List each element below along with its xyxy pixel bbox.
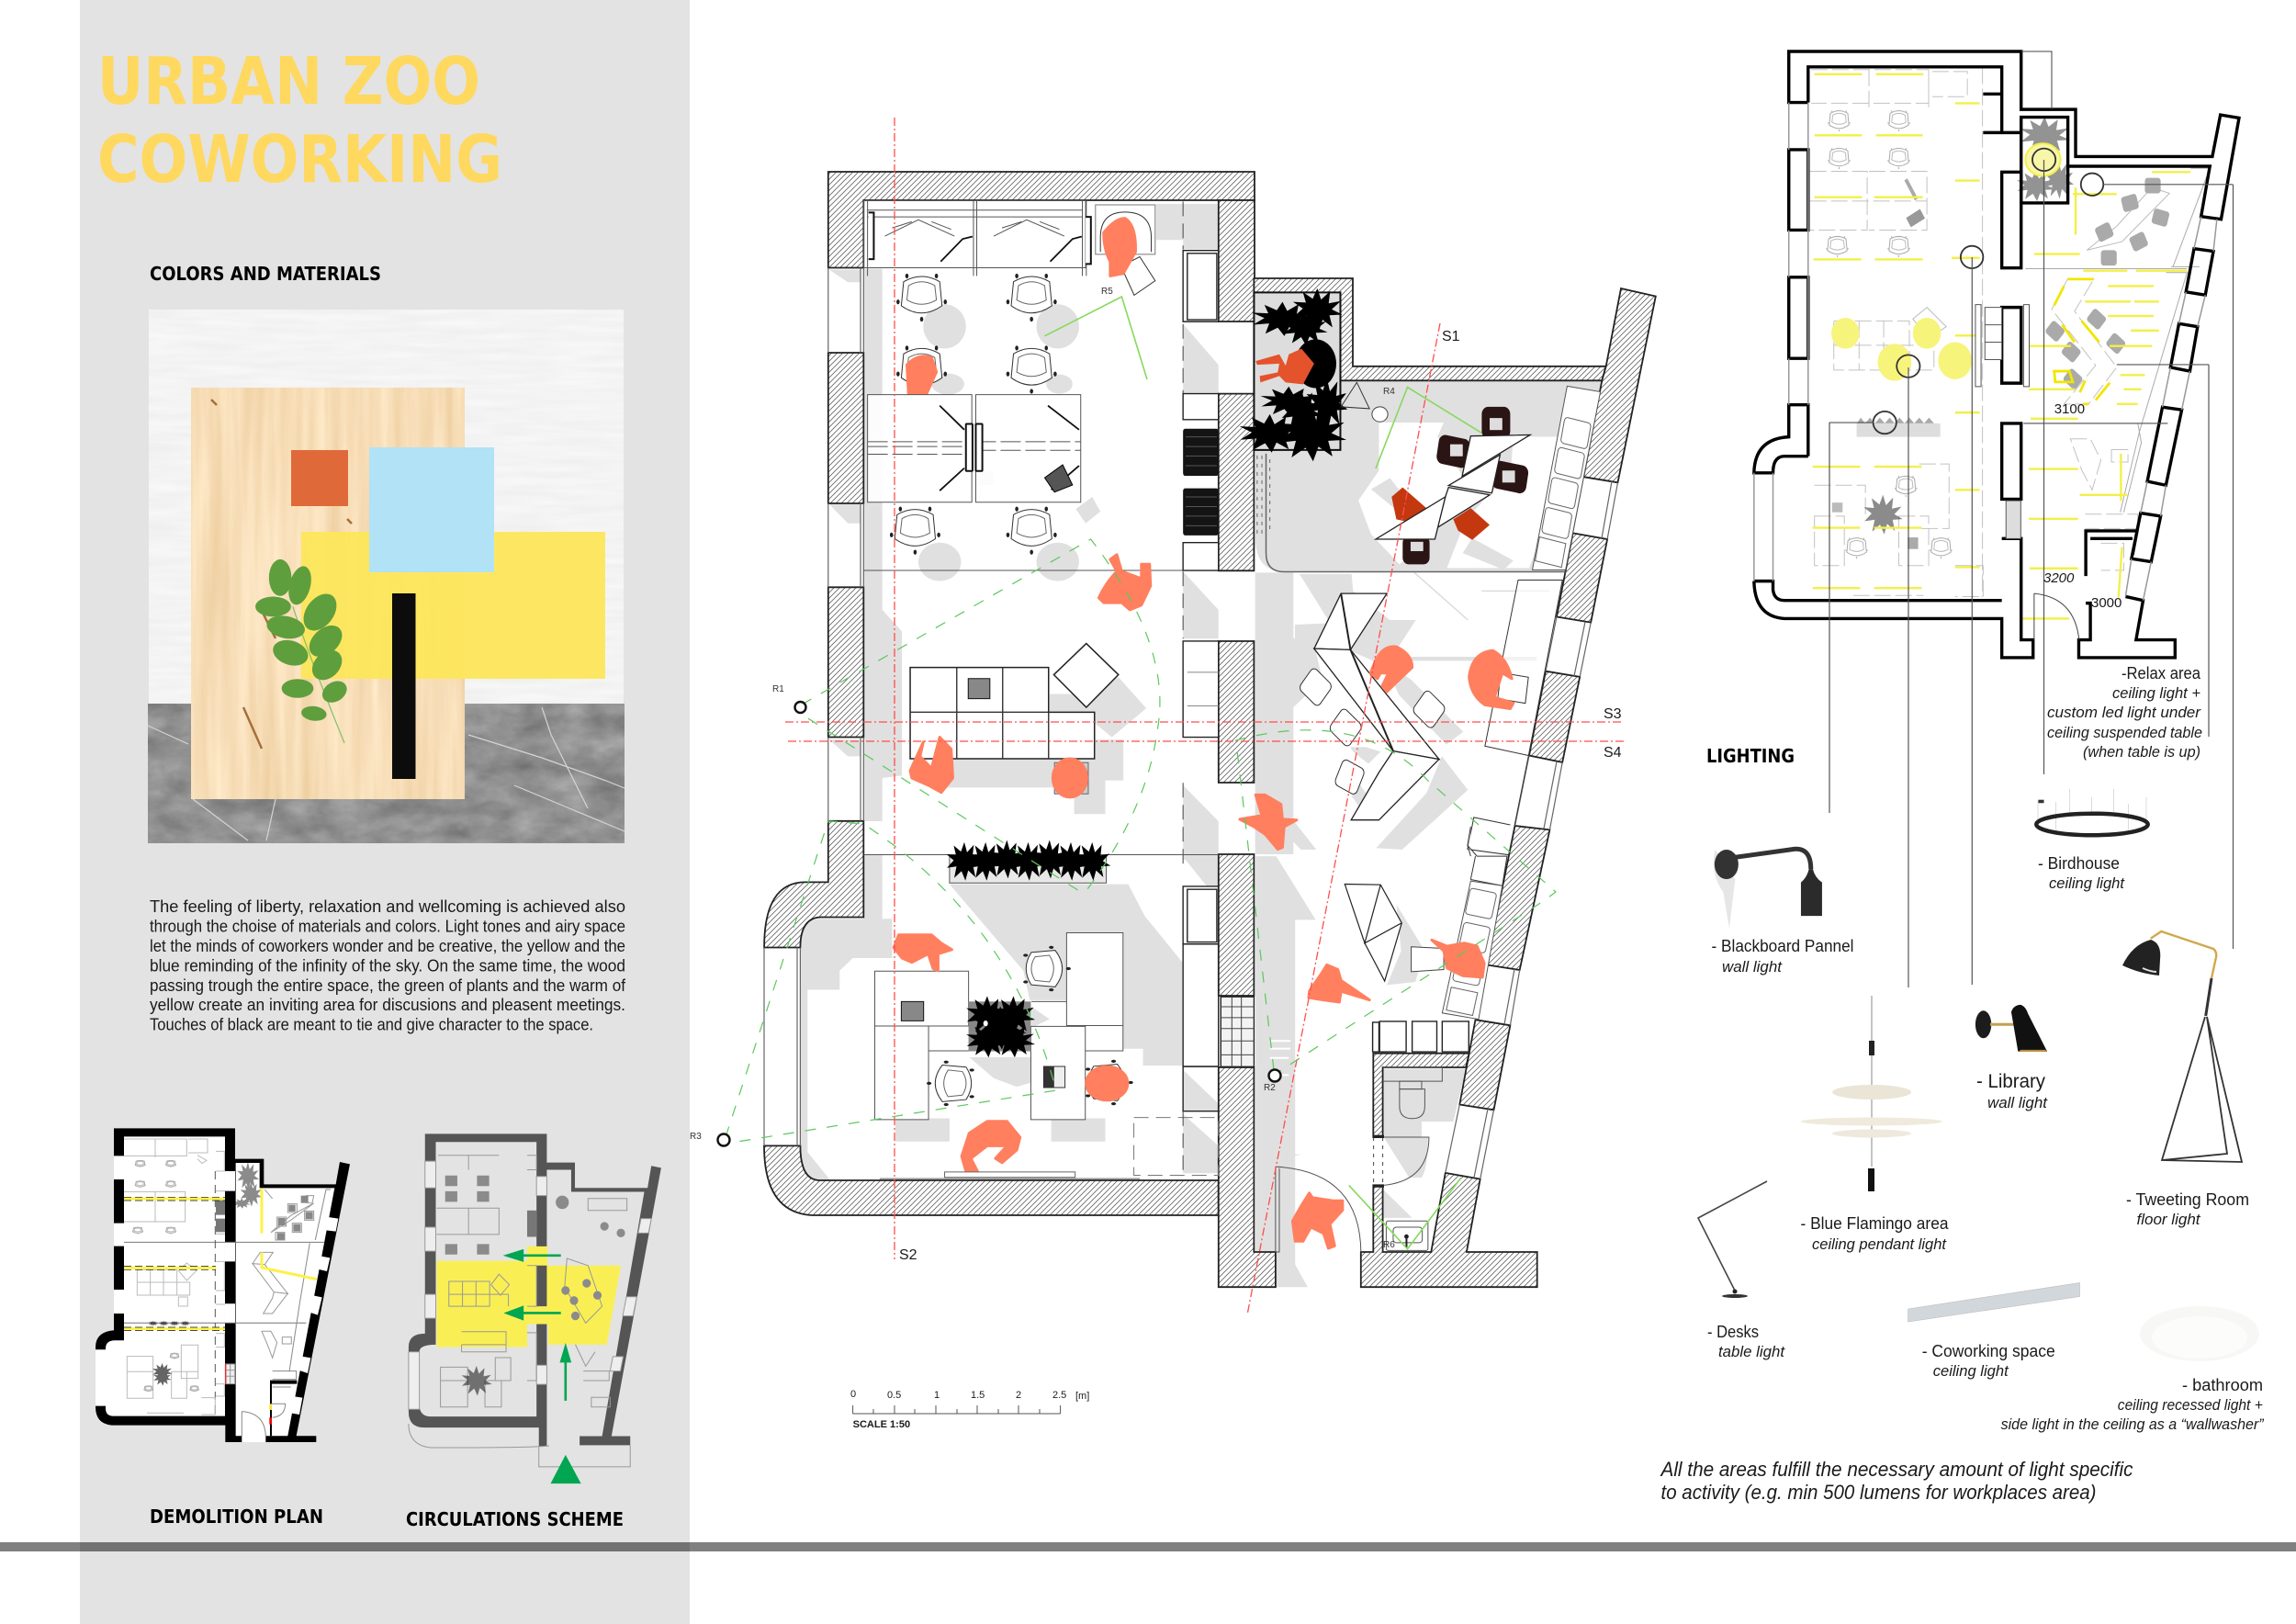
label: relax area xyxy=(2047,664,2202,761)
label: blue flamingo area: ceiling pendant light xyxy=(1812,1235,1947,1253)
building walls xyxy=(1754,51,2239,658)
lighting plan xyxy=(1754,51,2239,987)
lighting niche plant xyxy=(2017,117,2074,203)
cabinet row xyxy=(1373,1021,1469,1052)
text block: materials description: blue reminding of the infinity of the sky. On the same time, the wood xyxy=(150,957,625,976)
label: tweeting room: - Tweeting Room xyxy=(2126,1190,2249,1209)
entry area furniture xyxy=(1276,827,1507,1252)
door xyxy=(1276,1167,1361,1252)
label: blackboard pannel: - Blackboard Pannel xyxy=(1712,937,1853,955)
scale bar: 0.5 xyxy=(887,1390,901,1401)
section lines: S3 xyxy=(1604,706,1622,722)
label: coworking space: ceiling light xyxy=(1933,1362,2009,1380)
scale bar: 0 xyxy=(850,1389,856,1400)
label: relax area: (when table is up) xyxy=(2083,743,2200,761)
label: tweeting room xyxy=(2126,1190,2249,1228)
heading: demolition plan: DEMOLITION PLAN xyxy=(150,1506,323,1528)
scale bar: 1.5 xyxy=(971,1390,985,1401)
icon: coworking linear light xyxy=(1908,1282,2079,1322)
lighting plan: 3000 xyxy=(2091,595,2122,611)
icon: birdhouse ring light xyxy=(2036,789,2148,835)
lighting furniture base xyxy=(1773,67,2210,601)
scale bar: [m] xyxy=(1075,1391,1089,1402)
hatched walls xyxy=(764,172,1656,1287)
section lines: S2 xyxy=(899,1247,917,1263)
section lines: S4 xyxy=(1604,745,1622,761)
scale bar: 1 xyxy=(934,1390,940,1401)
icon: leaf branch xyxy=(255,559,349,743)
panel: left sidebar xyxy=(80,0,690,1624)
label: desks: - Desks xyxy=(1707,1323,1759,1341)
text block: materials description: Touches of black are meant to tie and give character to the space. xyxy=(150,1016,593,1034)
label: blue flamingo area xyxy=(1800,1214,1949,1253)
title: URBAN ZOO xyxy=(97,43,480,119)
yellow ceiling lights xyxy=(1813,74,2190,618)
label: blackboard pannel xyxy=(1712,937,1853,976)
text block: materials description: The feeling of liberty, relaxation and wellcoming is achieved also xyxy=(150,897,625,916)
label: bathroom: ceiling recessed light + xyxy=(2118,1396,2263,1414)
furniture: lower left room xyxy=(874,840,1140,1179)
icon: desk table lamp xyxy=(1698,1181,1767,1298)
window bench cushions xyxy=(1533,386,1601,570)
relax area furniture xyxy=(1257,382,1601,571)
text block: materials description: yellow create an inviting area for discusions and pleasent meetings. xyxy=(150,996,625,1014)
label: birdhouse xyxy=(2038,854,2125,892)
section lines: S1 xyxy=(1442,329,1460,344)
furniture: top desks row xyxy=(863,200,1155,295)
basin xyxy=(1386,1221,1428,1250)
text block: materials description: through the choise of materials and colors. Light tones and airy space xyxy=(150,917,625,935)
scale bar: 2.5 xyxy=(1052,1390,1066,1401)
label: relax area: ceiling light + xyxy=(2112,684,2200,702)
render view cones: R6 xyxy=(1383,1240,1395,1250)
render view cones: R2 xyxy=(1264,1083,1276,1093)
label: birdhouse: - Birdhouse xyxy=(2038,854,2120,873)
icon: blackboard wall lamp xyxy=(1714,849,1822,929)
scale bar: SCALE 1:50 xyxy=(853,1419,910,1430)
left room partition lines and spine cabinets xyxy=(863,201,1254,1176)
label: birdhouse: ceiling light xyxy=(2049,874,2125,892)
armchair xyxy=(1096,205,1155,295)
relax room floor xyxy=(1255,380,1602,571)
person xyxy=(1104,219,1135,276)
orange seated people at table xyxy=(1391,488,1490,540)
note: lighting requirements: All the areas fulfill the necessary amount of light specific xyxy=(1660,1458,2133,1481)
title: COWORKING xyxy=(97,121,502,197)
window frames xyxy=(764,268,1618,1179)
render view cones xyxy=(690,287,1556,1250)
heading: lighting: LIGHTING xyxy=(1706,745,1795,767)
section lines xyxy=(785,118,1626,1313)
lighting plan: 3200 xyxy=(2043,570,2075,586)
lighting plan: 3100 xyxy=(2054,401,2085,417)
footer band xyxy=(0,1542,2296,1551)
main floor plan xyxy=(690,118,1656,1430)
furniture: chairs and bench desks xyxy=(868,274,1081,555)
label: desks: table light xyxy=(1718,1343,1785,1360)
label: relax area: ceiling suspended table xyxy=(2047,724,2202,741)
label: relax area: -Relax area xyxy=(2122,664,2201,682)
material collage xyxy=(148,310,625,843)
yellow light circles xyxy=(1831,318,1972,381)
label: desks xyxy=(1707,1323,1785,1360)
black relax chairs xyxy=(1402,407,1529,564)
icon: blue flamingo pendant light xyxy=(1801,996,1942,1191)
text block: materials description xyxy=(150,897,626,1034)
text block: materials description: let the minds of coworkers wonder and be creative, the yellow and the xyxy=(150,937,625,955)
text block: materials description: passing trough the entire space, the green of plants and the warm of xyxy=(150,976,626,995)
label: tweeting room: floor light xyxy=(2136,1211,2201,1228)
plan lighting section labels xyxy=(1874,149,2103,434)
label: relax area: custom led light under xyxy=(2047,704,2201,721)
middle room shadows xyxy=(1255,572,1549,854)
plant niche xyxy=(1240,288,1347,461)
heading: colors and materials: COLORS AND MATERIALS xyxy=(150,263,381,285)
label: blue flamingo area: - Blue Flamingo area xyxy=(1800,1214,1949,1233)
render view cones: R1 xyxy=(772,684,784,694)
demolition plan drawing xyxy=(96,1128,350,1442)
label: bathroom xyxy=(2001,1376,2265,1433)
toilet xyxy=(1383,1067,1442,1119)
note: lighting requirements: to activity (e.g. min 500 lumens for workplaces area) xyxy=(1660,1481,2096,1504)
lighting callout lines xyxy=(1829,160,2234,987)
render view cones: R5 xyxy=(1101,287,1113,297)
scale bar: 2 xyxy=(1016,1390,1021,1401)
label: coworking space: - Coworking space xyxy=(1922,1342,2055,1360)
label: library: wall light xyxy=(1987,1094,2048,1111)
label: blackboard pannel: wall light xyxy=(1722,958,1783,976)
label: bathroom: side light in the ceiling as a “wallwasher” xyxy=(2001,1415,2265,1433)
icon: recessed bathroom light xyxy=(2140,1306,2259,1361)
note: lighting requirements xyxy=(1660,1458,2133,1504)
icon: library wall lamp xyxy=(1975,1005,2047,1052)
render view cones: R3 xyxy=(690,1132,702,1142)
floor shadows: left room xyxy=(800,204,1219,1179)
label: library xyxy=(1976,1071,2048,1111)
render view cones: R4 xyxy=(1383,387,1395,397)
icon: entrance triangle xyxy=(550,1455,581,1483)
tweeting room table and stools xyxy=(1240,580,1562,855)
circulations scheme drawing xyxy=(409,1133,661,1483)
floor shadows: right rooms xyxy=(1255,423,1567,1287)
heading: circulations scheme: CIRCULATIONS SCHEME xyxy=(406,1508,624,1530)
icon: tweeting room floor lamp xyxy=(2122,931,2242,1162)
label: library: - Library xyxy=(1976,1071,2045,1092)
furniture: blue flamingo grid table xyxy=(910,555,1151,797)
label: coworking space xyxy=(1922,1342,2055,1380)
label: bathroom: - bathroom xyxy=(2182,1376,2263,1394)
title xyxy=(97,43,502,197)
scale bar xyxy=(850,1389,1089,1430)
